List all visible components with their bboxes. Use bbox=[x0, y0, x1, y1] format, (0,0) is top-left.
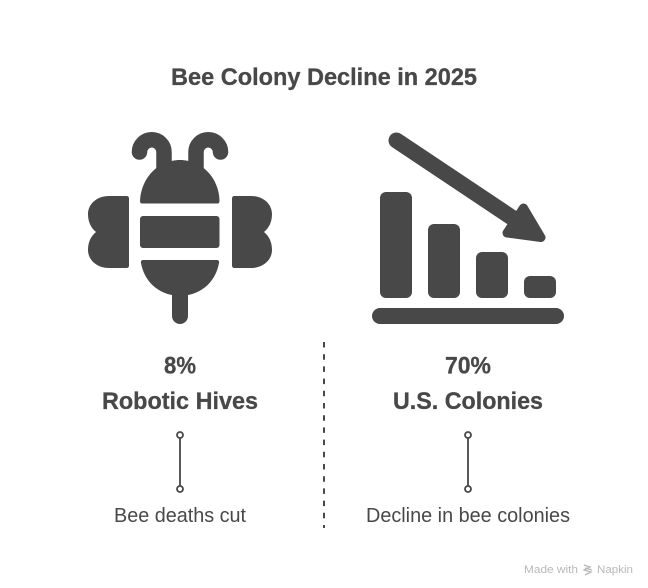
right description: Decline in bee colonies bbox=[366, 505, 570, 527]
bar 3 bbox=[476, 252, 508, 298]
chart baseline bbox=[372, 308, 564, 324]
right heading: U.S. Colonies: U.S. Colonies bbox=[393, 388, 543, 415]
falling arrow shaft bbox=[396, 140, 520, 223]
watermark bbox=[524, 564, 633, 576]
icon: declining bar chart with arrow bbox=[372, 140, 564, 324]
icon: Napkin logo bbox=[584, 565, 592, 575]
bee left wing bbox=[88, 196, 129, 268]
bar 4 bbox=[524, 276, 556, 298]
watermark: Napkin bbox=[597, 564, 633, 576]
right connector bbox=[465, 432, 471, 492]
bee right wing bbox=[232, 196, 272, 268]
left connector bbox=[177, 432, 183, 492]
left description: Bee deaths cut bbox=[114, 505, 246, 527]
watermark: Made with bbox=[524, 564, 578, 576]
bar 1 bbox=[380, 192, 412, 298]
title: Bee Colony Decline in 2025 bbox=[171, 64, 477, 91]
bee right antenna bbox=[196, 140, 220, 172]
bee left antenna bbox=[140, 140, 164, 172]
bee abdomen and stinger bbox=[141, 260, 219, 324]
right stat: 70%: 70% bbox=[445, 352, 491, 380]
left heading: Robotic Hives: Robotic Hives bbox=[102, 388, 258, 415]
bar 2 bbox=[428, 224, 460, 298]
bee head bbox=[140, 160, 220, 204]
bee thorax bbox=[140, 216, 220, 248]
falling arrow head bbox=[507, 208, 541, 238]
left stat: 8%: 8% bbox=[164, 352, 196, 380]
icon: bee bbox=[88, 140, 272, 324]
